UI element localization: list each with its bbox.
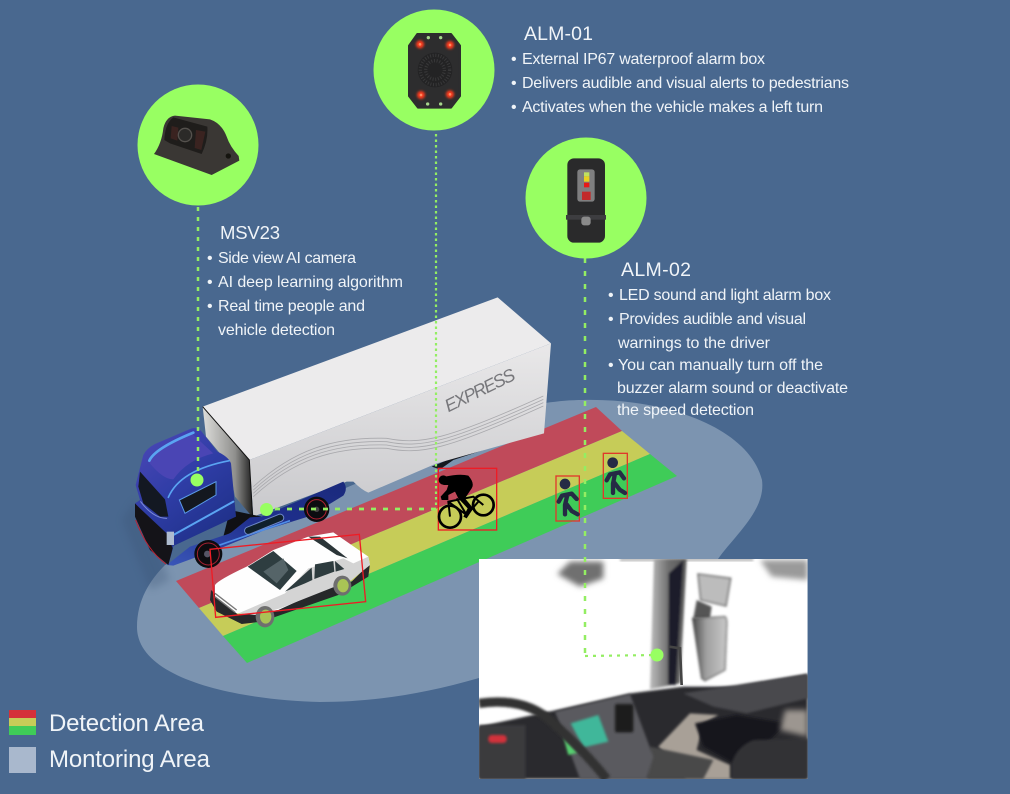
cyclist box <box>438 468 497 530</box>
mirror arm <box>693 600 712 618</box>
a-pillar <box>650 559 687 689</box>
bullet list: • <box>608 357 614 374</box>
bullet list: • <box>608 287 614 304</box>
rear wheel <box>333 576 351 596</box>
grab handle <box>669 647 682 685</box>
bullet list: LED sound and light alarm box <box>619 287 831 304</box>
icon: LED alarm box <box>566 158 606 243</box>
upper side mirror <box>698 574 731 606</box>
seat <box>732 738 808 779</box>
trailer side face <box>249 343 551 517</box>
side windows <box>285 568 312 592</box>
rear window <box>308 537 348 558</box>
red band <box>176 407 622 608</box>
icon: external alarm box <box>409 34 460 108</box>
connector: ALM-01 vertical <box>435 134 437 508</box>
car side panel <box>238 557 370 615</box>
legend swatch: monitoring area <box>9 747 36 773</box>
headlight <box>167 532 174 545</box>
windshield <box>248 551 297 590</box>
bullet list <box>608 287 848 419</box>
car with detection box <box>210 532 370 627</box>
trailer swoosh lines <box>253 396 543 497</box>
bullet list <box>511 51 849 116</box>
rear drive wheel <box>304 497 329 522</box>
connector dot: alarm on chassis <box>260 503 273 516</box>
bullet list: buzzer alarm sound or deactivate <box>617 380 848 397</box>
bullet list: vehicle detection <box>218 322 335 339</box>
front wheel <box>256 606 274 627</box>
upper right trim <box>760 560 808 580</box>
dark footwell <box>695 715 787 763</box>
text block: ALM-02 <box>608 259 848 419</box>
heading: ALM-02: ALM-02 <box>621 259 691 281</box>
express lettering: EXPRESS <box>441 365 518 416</box>
bullet list: AI deep learning algorithm <box>218 274 403 291</box>
red button <box>488 735 507 743</box>
tractor chassis <box>167 482 346 566</box>
navigation screen <box>571 715 608 747</box>
cab highlights <box>141 433 233 535</box>
center console <box>647 747 713 779</box>
bullet list: • <box>207 250 213 267</box>
bullet list: • <box>207 274 213 291</box>
bullet list: • <box>608 311 614 328</box>
yellow band <box>199 431 650 636</box>
right dash panel <box>683 674 808 713</box>
trailer front face <box>203 407 253 517</box>
frame shadow <box>223 510 262 537</box>
pedestrian box <box>556 476 579 521</box>
bumper <box>135 503 173 565</box>
dashboard <box>479 674 808 779</box>
trailer top face <box>203 297 551 460</box>
air vent <box>615 704 633 732</box>
cab body <box>135 428 236 564</box>
cyclist <box>439 475 494 528</box>
green band <box>223 454 677 663</box>
side window <box>179 482 216 513</box>
text block: ALM-01 <box>511 23 849 116</box>
connector: ALM-02 vertical <box>584 258 586 656</box>
connector: MSV23 <box>197 207 199 480</box>
pedestrian 2 with detection box <box>603 453 627 498</box>
monitoring area <box>137 400 762 702</box>
interior rear-view mirror <box>557 562 603 587</box>
top trim <box>620 558 753 561</box>
roof panel <box>148 433 213 479</box>
circle: ALM-01 alarm box <box>374 10 494 130</box>
bullet list: Delivers audible and visual alerts to pedestrians <box>522 75 849 92</box>
front wheel <box>194 540 222 568</box>
icon: side camera <box>154 116 239 175</box>
bullet list: • <box>207 298 213 315</box>
bullet list: • <box>511 75 517 92</box>
bullet list: Side view AI camera <box>218 250 356 267</box>
car body <box>215 532 370 613</box>
tractor cab <box>135 428 236 568</box>
bullet list: You can manually turn off the <box>618 357 823 374</box>
cyclist with detection box <box>438 468 497 530</box>
bullet list: External IP67 waterproof alarm box <box>522 51 765 68</box>
chassis vent <box>243 513 285 535</box>
pedestrian figure <box>559 479 578 514</box>
photo background <box>479 559 808 779</box>
bullet list: • <box>511 99 517 116</box>
legend label: detection area: Detection Area <box>49 710 205 737</box>
connector dot: in-cab alarm <box>650 648 664 662</box>
cab interior photo <box>479 558 808 779</box>
car detection box <box>210 534 366 617</box>
truck <box>122 297 551 590</box>
bullet list: Activates when the vehicle makes a left turn <box>522 99 823 116</box>
connector: ALM-02 horizontal <box>585 655 657 656</box>
bullet list: Real time people and <box>218 298 365 315</box>
text block: MSV23 <box>207 222 403 339</box>
bullet list: the speed detection <box>617 402 754 419</box>
heading: ALM-01: ALM-01 <box>524 23 593 45</box>
circle: ALM-02 alarm box <box>526 138 646 258</box>
side mirror <box>693 617 727 681</box>
connector dot: camera on cab <box>190 474 204 486</box>
rear wheels <box>432 442 493 469</box>
steering wheel <box>479 702 607 779</box>
legend label: monitoring area: Montoring Area <box>49 746 211 773</box>
bullet list: Provides audible and visual <box>619 311 806 328</box>
car underbody <box>210 563 370 624</box>
beige console <box>658 713 730 779</box>
connector: ALM-01 horizontal <box>267 508 436 510</box>
chassis <box>167 482 346 566</box>
bullet list: • <box>511 51 517 68</box>
windshield <box>138 472 168 517</box>
truck shadow <box>122 500 170 590</box>
legend <box>9 710 211 773</box>
infotainment panel <box>555 694 653 779</box>
detection area bands <box>176 407 677 663</box>
left instrument panel <box>479 725 526 779</box>
pedestrian box <box>603 453 627 498</box>
trailer <box>203 297 551 517</box>
heading: MSV23: MSV23 <box>220 222 280 243</box>
pedestrian figure <box>607 457 625 493</box>
connector lines <box>198 134 657 656</box>
console right beige <box>780 710 808 737</box>
circle: MSV23 camera <box>138 84 258 206</box>
legend swatch: detection area <box>9 710 36 735</box>
grille <box>215 593 237 612</box>
bullet list: warnings to the driver <box>617 335 771 352</box>
pedestrian 1 with detection box <box>556 476 579 521</box>
bullet list <box>207 250 403 339</box>
